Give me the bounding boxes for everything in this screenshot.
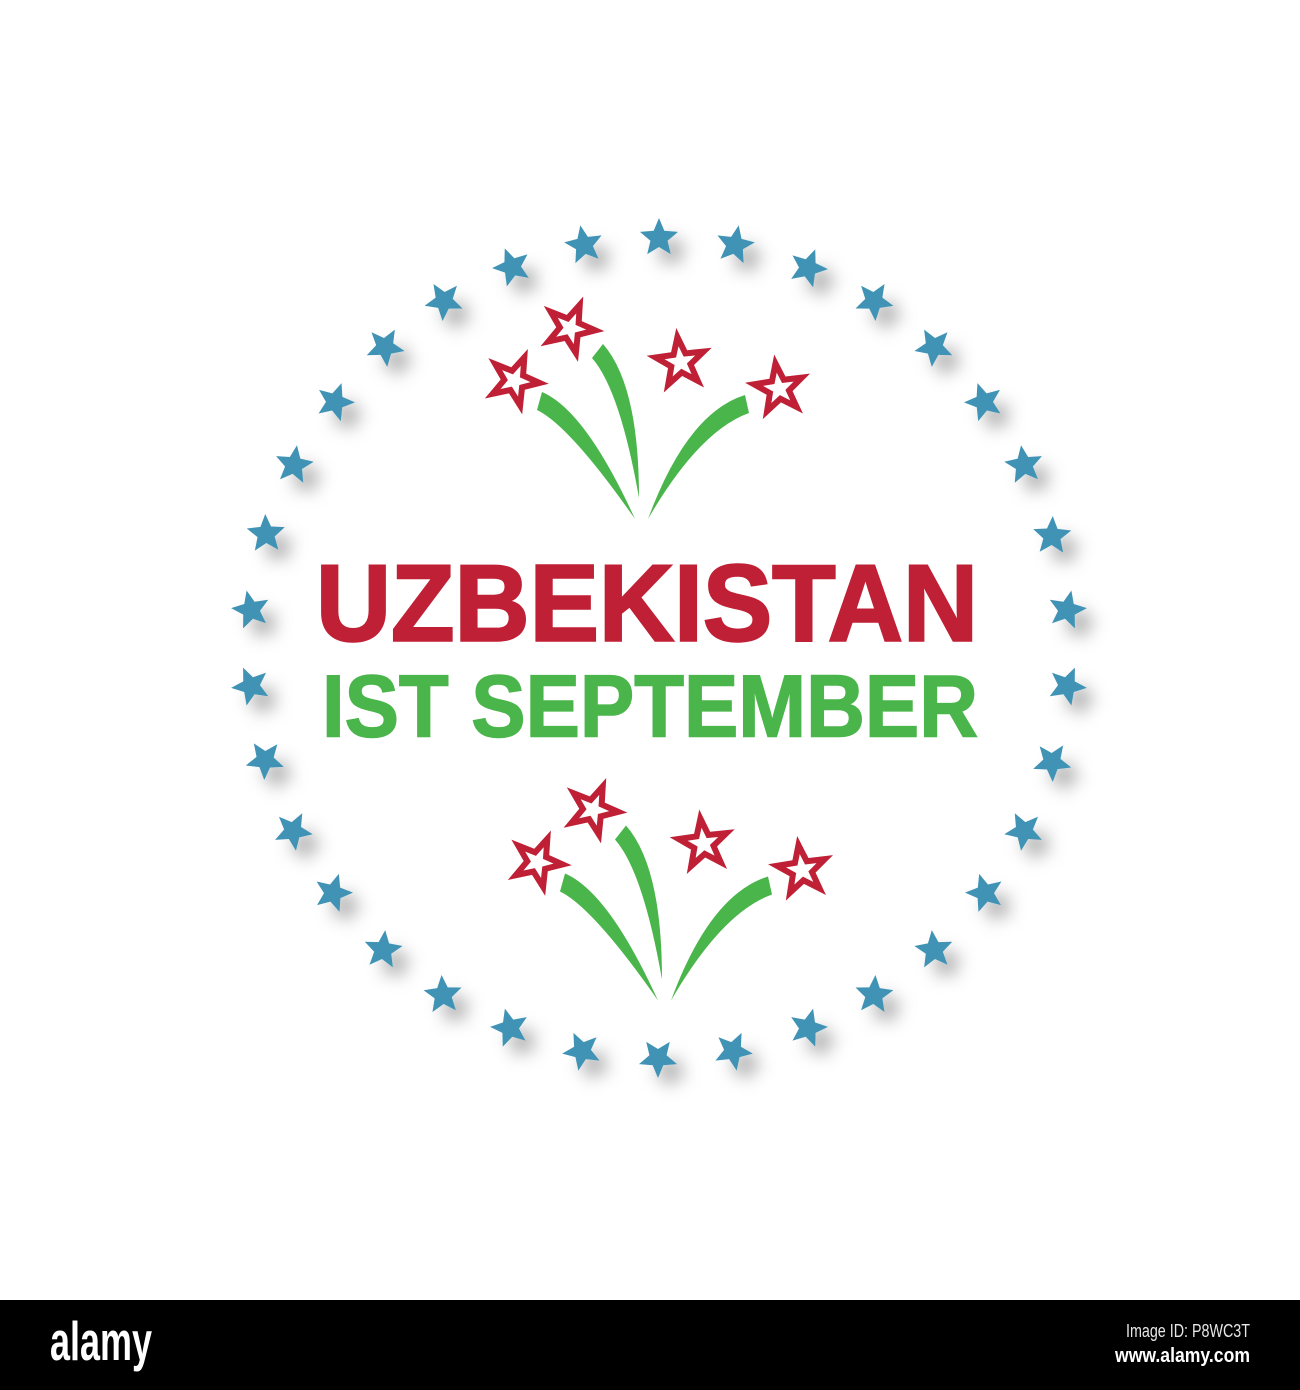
footer logo: alamy: alamy bbox=[50, 1310, 152, 1372]
ring of blue stars bbox=[229, 218, 1089, 1078]
icon: top fireworks bbox=[473, 284, 815, 519]
subtitle: 1st September: IST SEPTEMBER bbox=[322, 656, 978, 756]
image id: Image ID: P8WC3T bbox=[1126, 1321, 1250, 1341]
footer bar bbox=[0, 1300, 1300, 1390]
website: www.alamy.com bbox=[1114, 1345, 1250, 1367]
icon: bottom fireworks bbox=[496, 765, 838, 1000]
title: Uzbekistan: UZBEKISTAN bbox=[316, 542, 978, 664]
